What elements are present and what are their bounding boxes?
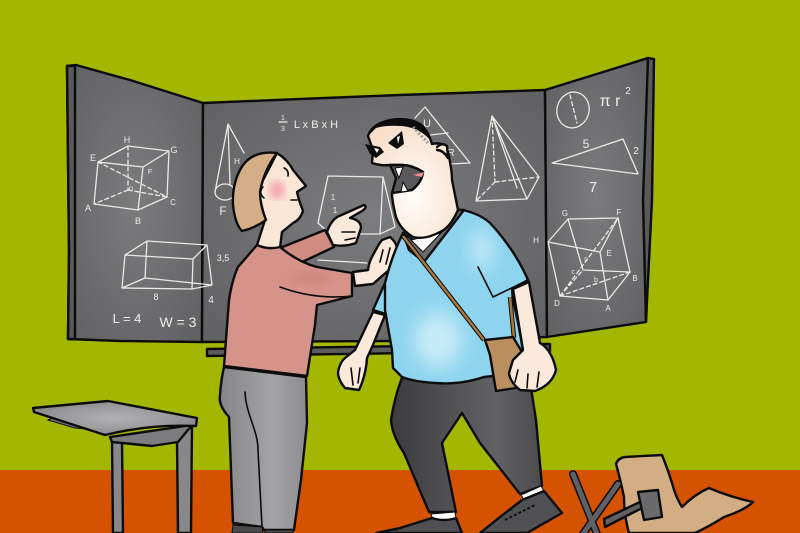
chair bracket bbox=[638, 490, 662, 520]
chalk drawing: trapezoid prism: 1 bbox=[333, 206, 338, 215]
panel: right board bbox=[545, 58, 648, 337]
chalk drawing: cuboid with dimensions: 3,5 bbox=[217, 253, 229, 263]
panel: middle board bbox=[202, 90, 547, 342]
sweater body bbox=[224, 245, 352, 376]
chalk drawing: right cuboid with labels bbox=[548, 208, 638, 313]
chalk drawing: right cuboid with labels: c bbox=[571, 269, 575, 276]
chalk drawing: cube with labels: A bbox=[85, 203, 91, 213]
chalk drawing: trapezoid prism: 1 bbox=[331, 193, 336, 202]
chalk drawing: cuboid with dimensions bbox=[122, 241, 229, 306]
woman trousers bbox=[220, 367, 307, 530]
chalk drawing: cube with labels: E bbox=[90, 153, 96, 163]
angry brows bbox=[365, 131, 404, 158]
chalk drawing: cube with labels: B bbox=[135, 216, 141, 226]
shirt sleeve crease bbox=[478, 267, 528, 297]
chalk drawing: right cuboid with labels: G bbox=[562, 209, 568, 218]
hair bbox=[233, 153, 277, 231]
tongue bbox=[413, 172, 424, 177]
table underside bbox=[110, 425, 192, 446]
table rear support bbox=[48, 414, 100, 430]
chalk formula: volume bbox=[279, 115, 338, 133]
white undershirt bbox=[411, 233, 441, 252]
tipped-over chair bbox=[573, 455, 753, 533]
chair rod bbox=[604, 501, 644, 527]
chalk drawing: triangle with sides: 5 bbox=[583, 137, 590, 151]
chalk drawing: cube with labels: F bbox=[148, 169, 152, 176]
teeth bbox=[395, 167, 408, 192]
chalk formula: volume: 1 bbox=[281, 115, 285, 122]
floor bbox=[0, 470, 800, 533]
chalk drawing: right cuboid with labels: B bbox=[632, 274, 638, 283]
left shoe bbox=[376, 518, 462, 533]
chalk text: W = 3: W = 3 bbox=[160, 314, 197, 330]
chalk drawing: triangle behind head: R bbox=[447, 148, 455, 159]
chalk drawing: right cuboid with labels: c bbox=[584, 256, 588, 263]
chalk drawing: triangle behind head bbox=[415, 107, 470, 164]
man right arm and fist bbox=[509, 282, 556, 391]
stubble bbox=[413, 127, 428, 143]
chalk drawing: circle formula: π r bbox=[600, 93, 621, 110]
angry man bbox=[338, 118, 562, 533]
chair seat and back bbox=[616, 455, 753, 533]
chalk formula: volume: 3 bbox=[281, 126, 285, 133]
brown shoulder bag bbox=[485, 337, 522, 391]
table bbox=[33, 401, 197, 533]
right board edge bbox=[643, 58, 654, 322]
chair legs bbox=[573, 474, 618, 533]
shirt highlights bbox=[414, 230, 494, 368]
chalk drawing: right cuboid with labels: b bbox=[594, 277, 598, 284]
chalk drawing: cube with labels bbox=[85, 135, 178, 226]
shirt sleeve left bbox=[373, 283, 386, 314]
chalk drawing: triangle behind head: U bbox=[423, 118, 431, 130]
chalk drawing: cube with labels: H bbox=[124, 135, 130, 145]
sweater shading bbox=[290, 271, 330, 285]
chalk drawing: cone: H bbox=[234, 157, 240, 166]
shirt body bbox=[385, 210, 528, 383]
chalk drawing: cube with labels: G bbox=[170, 145, 178, 155]
chalk drawing: circle formula: 2 bbox=[625, 86, 631, 97]
chalk drawing: cuboid with dimensions: 8 bbox=[153, 292, 159, 302]
bag strap bbox=[403, 236, 514, 340]
mouth interior bbox=[390, 165, 423, 193]
shirt collar bbox=[403, 210, 464, 262]
man head bbox=[368, 119, 458, 238]
blackboard rail bbox=[207, 344, 550, 356]
chalk drawing: triangle with sides: 2 bbox=[633, 146, 639, 157]
man left arm bbox=[338, 312, 385, 390]
socks bbox=[431, 486, 544, 520]
chalk drawing: cone: F bbox=[219, 204, 227, 218]
sleeve crease bbox=[280, 287, 352, 297]
shoelaces bbox=[395, 498, 535, 530]
chalk drawing: circle formula bbox=[553, 86, 631, 132]
chalk drawing: right cuboid with labels: F bbox=[617, 208, 622, 217]
right shoe bbox=[480, 491, 562, 533]
finger lines bbox=[342, 232, 390, 264]
raised sleeve bbox=[280, 230, 334, 263]
man trousers bbox=[391, 375, 542, 512]
chalk drawing: right cuboid with labels: A bbox=[605, 304, 611, 313]
table top bbox=[33, 401, 197, 435]
knuckle lines bbox=[351, 368, 539, 388]
folding blackboard bbox=[67, 58, 654, 342]
woman neck and face bbox=[257, 153, 306, 249]
chalk drawing: cube with labels: C bbox=[170, 198, 176, 207]
chalk formula: volume: L x B x H bbox=[294, 119, 338, 131]
chalk drawing: right cuboid with labels: E bbox=[606, 249, 612, 258]
chalk drawing: cuboid with dimensions: 4 bbox=[208, 295, 214, 306]
eyes bbox=[374, 136, 400, 153]
chalk drawing: pyramid bbox=[476, 116, 539, 201]
left board edge bbox=[67, 66, 75, 339]
mouth bbox=[291, 199, 297, 201]
panel: left board bbox=[67, 65, 203, 342]
woman teacher bbox=[220, 153, 397, 533]
ear bbox=[437, 144, 448, 158]
chalk label: H: H bbox=[533, 236, 539, 245]
pointing hand bbox=[327, 205, 366, 246]
flat raised hand bbox=[353, 237, 397, 286]
eye bbox=[284, 168, 288, 176]
chalk drawing: cone bbox=[215, 124, 244, 218]
chalk drawing: triangle with sides: 7 bbox=[589, 179, 597, 196]
chalk drawing: triangle with sides bbox=[552, 137, 639, 196]
chalk drawing: cube with labels: O bbox=[129, 187, 134, 193]
hair bbox=[368, 118, 430, 140]
woman shoes bbox=[232, 525, 293, 533]
table legs bbox=[112, 426, 192, 533]
trouser crease bbox=[245, 392, 262, 527]
chalk text: L = 4: L = 4 bbox=[113, 311, 141, 326]
ear bbox=[261, 187, 264, 198]
chalk drawing: trapezoid prism bbox=[318, 176, 395, 263]
chalk drawing: right cuboid with labels: D bbox=[554, 299, 560, 308]
cheek blush bbox=[269, 181, 285, 199]
